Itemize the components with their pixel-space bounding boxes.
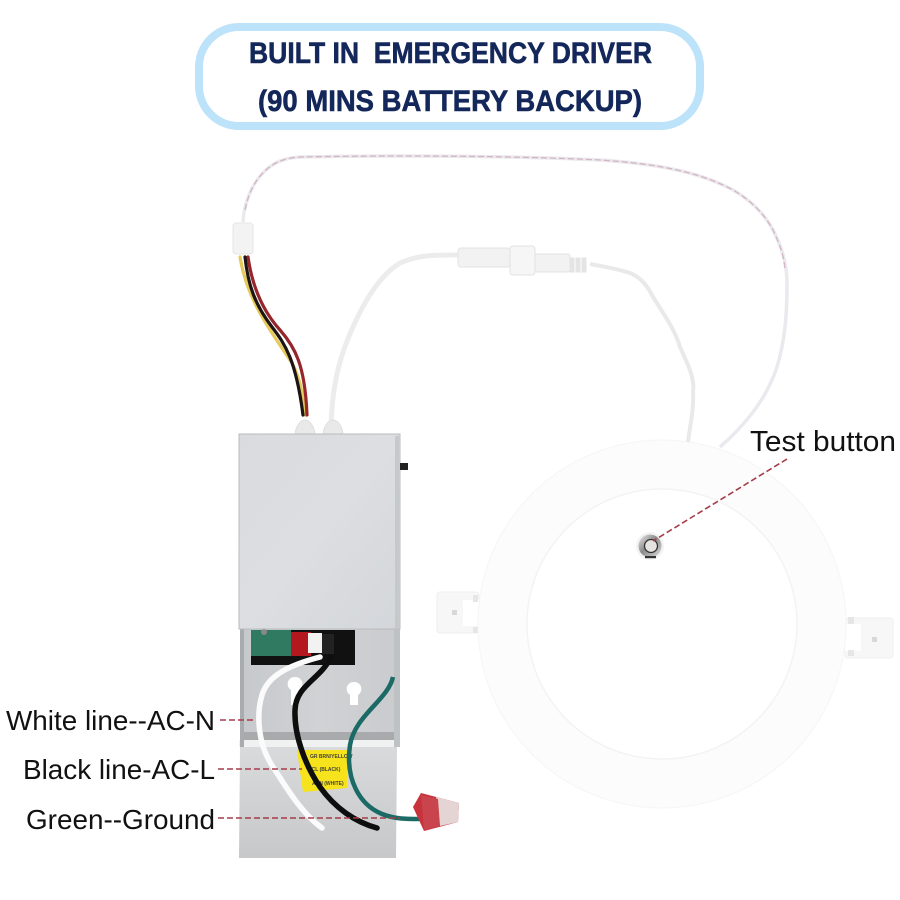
cable glands <box>295 420 343 434</box>
inner diffuser <box>527 489 797 759</box>
keyhole left <box>288 677 302 705</box>
callout: green ground: Green--Ground <box>26 804 215 835</box>
callout: test button: Test button <box>750 426 896 458</box>
front cover <box>239 747 397 858</box>
terminal block <box>291 632 311 656</box>
waterproof inline connector <box>458 246 586 275</box>
warning label: ACN (WHITE) <box>312 781 344 787</box>
red lever connector <box>413 793 459 831</box>
callout: black line: Black line-AC-L <box>23 754 215 785</box>
driver box <box>239 420 420 858</box>
small white wire connector <box>233 223 253 254</box>
title line 2: (90 MINS BATTERY BACKUP) <box>258 85 642 118</box>
callout: test button <box>653 426 896 541</box>
white waterproof cable <box>331 255 693 442</box>
keyhole right <box>347 682 361 705</box>
left mounting clip <box>437 592 479 633</box>
green ground wire <box>349 677 420 819</box>
title line 1: BUILT IN EMERGENCY DRIVER <box>249 37 652 70</box>
test button <box>636 532 664 560</box>
side switch <box>400 463 408 470</box>
top lid <box>239 434 400 629</box>
warning label: ACL (BLACK) <box>308 767 341 773</box>
long pink-printed white cable <box>243 156 787 447</box>
black AC live wire <box>295 657 377 828</box>
warning label <box>297 750 353 792</box>
white AC neutral wire <box>259 657 322 828</box>
outer trim ring <box>478 440 846 808</box>
callout: white line: White line--AC-N <box>6 705 215 736</box>
title badge <box>199 27 700 126</box>
circuit board <box>251 629 355 665</box>
warning label: GR BRN/YELLOW <box>310 754 353 760</box>
side rail <box>394 628 400 747</box>
yellow black red wires <box>240 257 307 415</box>
fold ledge <box>240 732 397 740</box>
LED panel light <box>437 440 893 808</box>
right mounting clip <box>845 617 893 658</box>
lower open compartment back <box>240 628 397 743</box>
